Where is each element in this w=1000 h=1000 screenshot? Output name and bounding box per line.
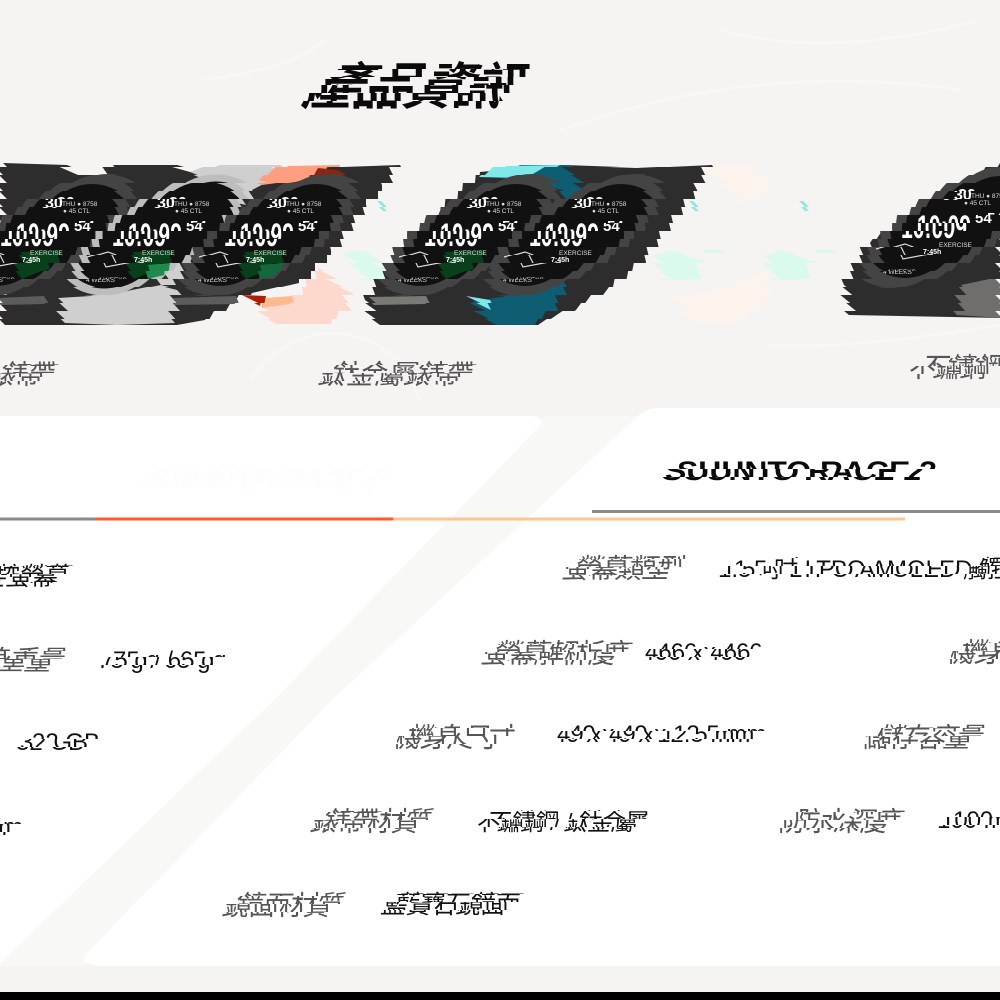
- watch 5: ● 45 CTL: [560, 208, 587, 215]
- watch 3: 54: [282, 218, 299, 235]
- teal watch strap: [395, 165, 669, 325]
- watch 2 white bezel: ● 45 CTL: [143, 208, 170, 215]
- watch 3: 4 WEEKS: [242, 277, 272, 284]
- grey strap lower right: [996, 278, 1000, 318]
- watch 5: [513, 179, 625, 291]
- row: resolution and weight: 466 x 466: [641, 639, 746, 666]
- watch 1: [0, 179, 96, 291]
- row: resolution and weight: 機身: [946, 638, 1000, 668]
- row: size and storage: 機身尺寸: [392, 723, 500, 753]
- watch 3: ● 45 CTL: [255, 208, 282, 215]
- row: lens material: 藍寶石鏡面: [380, 891, 505, 919]
- watch 6: 30: [906, 187, 924, 204]
- header rule grey: [592, 510, 1000, 513]
- caption: titanium band: 鈦金屬錶帶: [317, 360, 460, 390]
- watch 4: 4 WEEKS: [442, 277, 472, 284]
- bottom black strip: [0, 992, 1000, 1000]
- card left part: [0, 416, 541, 963]
- watch 2 white bezel: EXERCISE: [154, 250, 188, 257]
- watch 3: 7:45h: [262, 257, 280, 264]
- watch 2 white bezel: 4 WEEKS: [130, 277, 160, 284]
- strap stripe on dark watch: [428, 296, 495, 305]
- watch 1: 30: [9, 195, 27, 212]
- watch bodies and straps: [0, 163, 1000, 325]
- watch 4: ● 45 CTL: [455, 208, 482, 215]
- watch 4: 10:09: [424, 217, 478, 253]
- watch 4: 30: [433, 195, 451, 212]
- watch 4: THU ● 8758: [450, 201, 486, 208]
- watch 1: ● 45 CTL: [31, 208, 58, 215]
- faint peach ghost strap: [598, 165, 857, 325]
- caption: stainless band, right part: 不鏽鋼: [905, 353, 986, 383]
- watch 2 white bezel: 30: [121, 195, 139, 212]
- watch 5: 4 WEEKS: [547, 277, 577, 284]
- watch 4: [408, 179, 520, 291]
- watch 4: 7:45h: [462, 257, 480, 264]
- watch 5: 30: [538, 195, 556, 212]
- row: size and storage: 32 GB: [16, 729, 84, 756]
- dark watch group right: [766, 163, 1000, 318]
- watch 4: 54: [482, 218, 499, 235]
- watch 5: 7:45h: [567, 257, 585, 264]
- row: screen type: 螢幕類型: [560, 554, 668, 584]
- watch 5: EXERCISE: [571, 250, 605, 257]
- watch 3: EXERCISE: [266, 250, 300, 257]
- watch 3: THU ● 8758: [250, 201, 286, 208]
- peach and red strap: [172, 165, 436, 324]
- row: size and storage: [16, 721, 969, 756]
- watch 2 white bezel: THU ● 8758: [138, 201, 174, 208]
- heading: model name: SUUNTO RACE 2: [661, 456, 921, 486]
- row: lens material: 鏡面材質: [221, 891, 329, 921]
- faint model name: SUUNTO RACE 2: [135, 465, 375, 493]
- watch 3: 10:09: [224, 217, 278, 253]
- watch 1: 10:09: [0, 217, 54, 253]
- watch 6: [881, 171, 993, 283]
- watch lineup: [0, 163, 1000, 325]
- watch 6: 4 WEEKS: [915, 269, 945, 276]
- watch 2 white bezel: [95, 178, 209, 292]
- dark watches group left: [0, 163, 480, 325]
- watch 1: EXERCISE: [42, 250, 76, 257]
- card right part: [84, 408, 1000, 966]
- watch 6: 54: [955, 210, 972, 227]
- row: size and storage: 儲存容量: [861, 723, 969, 753]
- row: band and water resistance: 錶帶材質: [309, 807, 417, 837]
- faint mint ghost charts: [304, 201, 875, 280]
- row: resolution and weight: 螢幕解析度: [479, 639, 614, 669]
- white watch strap: [0, 165, 370, 325]
- row: band and water resistance: [0, 807, 1000, 841]
- row: band and water resistance: 防水深度: [778, 807, 886, 837]
- header rule multi-colour: [0, 518, 905, 520]
- watch 4: EXERCISE: [466, 250, 500, 257]
- strap stripes on dark watches: [56, 296, 305, 305]
- watch 1: THU ● 8758: [26, 201, 62, 208]
- watch 6: 10:09: [897, 209, 951, 245]
- watch 6: ● 45 CTL: [928, 200, 955, 207]
- diagonal background band: [0, 416, 640, 966]
- watch 5: 54: [587, 218, 604, 235]
- row: size and storage: 49 x 49 x 12.5 mm: [553, 721, 750, 748]
- watch 5: THU ● 8758: [555, 201, 591, 208]
- watch 5: 10:09: [529, 217, 583, 253]
- dark watches group middle: [290, 165, 792, 325]
- watch 1: 4 WEEKS: [18, 277, 48, 284]
- watch 2 white bezel: 10:09: [112, 217, 166, 253]
- title: 產品資訊: [300, 59, 500, 115]
- watch 6: THU ● 8758: [923, 193, 959, 200]
- watch 1: 7:45h: [38, 257, 56, 264]
- watch 3: 30: [233, 195, 251, 212]
- watch 3: [208, 179, 320, 291]
- watch 1: 54: [58, 218, 75, 235]
- row: band and water resistance: 不鏽鋼 / 鈦金屬: [473, 809, 634, 835]
- row: screen type: [0, 554, 1000, 591]
- row: lens material: [221, 891, 505, 921]
- watch 2 white bezel: 7:45h: [150, 257, 168, 264]
- row: resolution and weight: 75 g / 65 g: [97, 647, 210, 674]
- row: resolution and weight: [0, 638, 1000, 676]
- watch 6: EXERCISE: [939, 242, 973, 249]
- panel: spec card: [0, 408, 1000, 966]
- watch 6: 7:45h: [935, 249, 953, 256]
- watch 2 white bezel: 54: [170, 218, 187, 235]
